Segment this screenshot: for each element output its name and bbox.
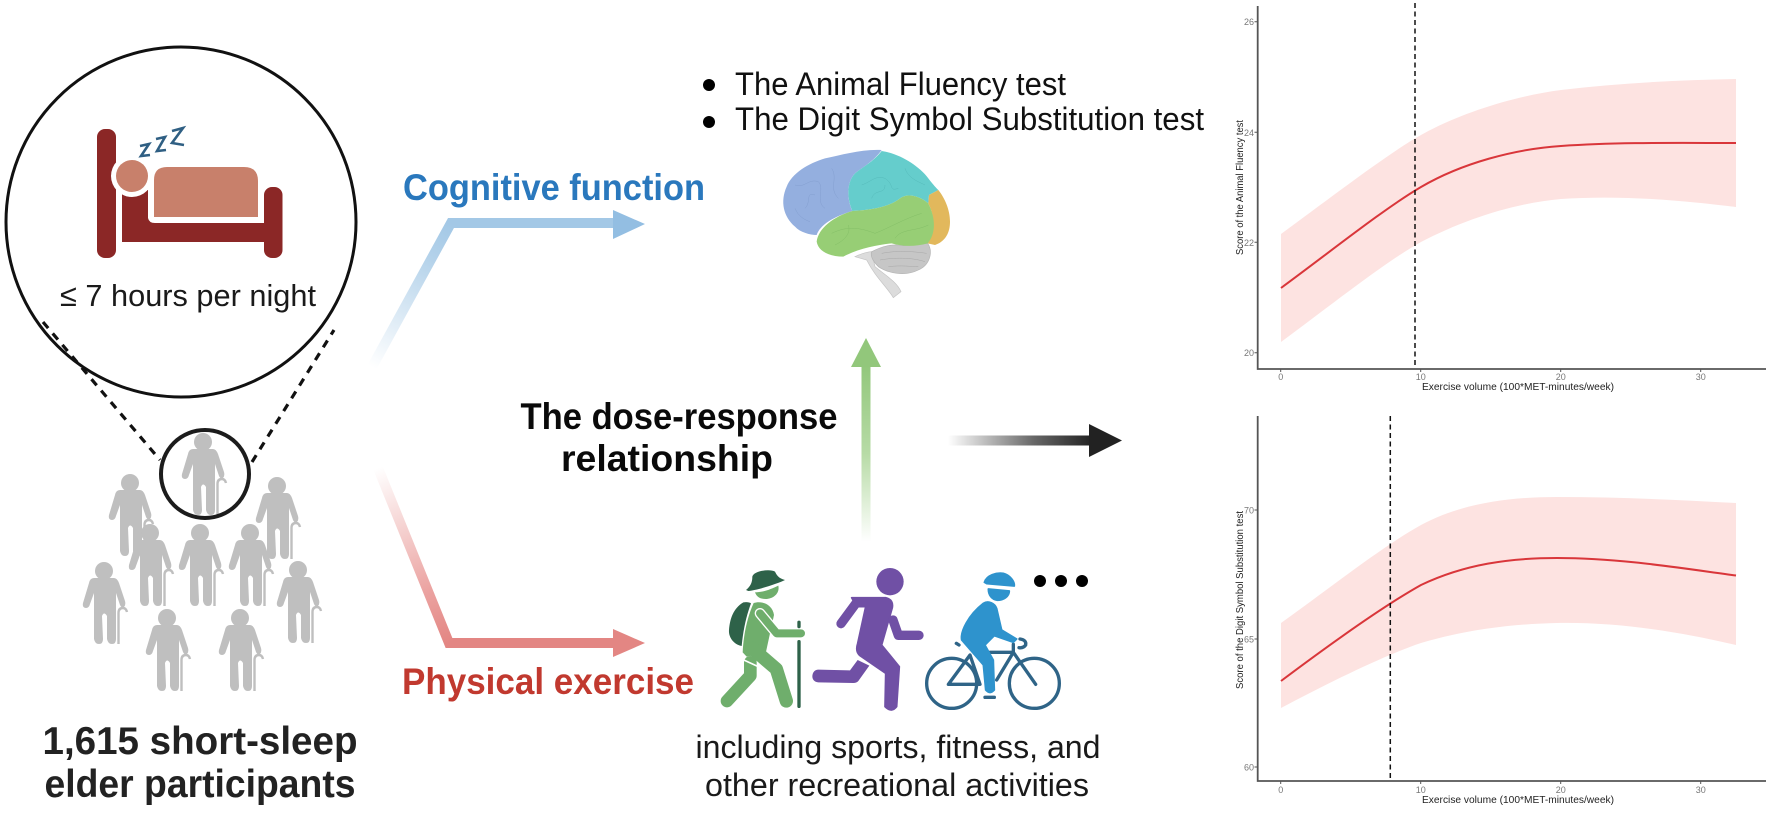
text: cognitive test list [703, 66, 1204, 137]
text: activity description: including sports, fitness, and [696, 729, 1100, 765]
heading: dose-response [520, 396, 838, 479]
icon: cyclist [927, 573, 1059, 708]
axis tick labels [1244, 17, 1706, 382]
text: cognitive test list: The Digit Symbol Substitution test [735, 101, 1204, 137]
arrow: to charts [948, 424, 1122, 457]
axis tick labels: 70 [1244, 506, 1254, 516]
axis tick labels: 60 [1244, 762, 1254, 772]
axis tick labels: 20 [1556, 785, 1566, 795]
text: sleep duration: ≤ 7 hours per night [60, 278, 316, 313]
chart: animal fluency: Score of the Animal Fluency test [1235, 120, 1246, 255]
heading: participants: elder participants [44, 763, 356, 806]
axis tick labels: 20 [1556, 372, 1566, 382]
text: activity description: other recreational activities [705, 767, 1089, 803]
dashed zoom lines [43, 322, 334, 462]
text: cognitive test list: The Animal Fluency test [735, 66, 1066, 102]
chart: digit symbol substitution: Score of the Digit Symbol Substitution test [1235, 511, 1246, 689]
icon: crowd of elders [83, 433, 321, 691]
axis tick labels: 0 [1278, 785, 1283, 795]
chart: digit symbol substitution: Exercise volume (100*MET-minutes/week) [1422, 795, 1614, 806]
axis tick labels: 65 [1244, 634, 1254, 644]
axis tick labels: 30 [1696, 785, 1706, 795]
heading: physical exercise: Physical exercise [402, 661, 694, 702]
axis tick labels: 22 [1244, 238, 1254, 248]
panel: sleep magnifier circle [6, 47, 356, 397]
heading: dose-response: relationship [561, 438, 773, 479]
heading: dose-response: The dose-response [520, 396, 838, 437]
arrow: to cognitive function [372, 210, 645, 367]
icon: runner [812, 568, 919, 710]
icon: hiker [727, 570, 801, 706]
arrow: exercise up to cognition [851, 338, 881, 542]
arrow: to physical exercise [378, 468, 645, 657]
chart: digit symbol substitution [1235, 416, 1766, 806]
axis tick labels: 10 [1416, 372, 1426, 382]
axis tick labels: 30 [1696, 372, 1706, 382]
icon: ellipsis dots [1034, 575, 1088, 587]
chart: animal fluency [1235, 3, 1766, 393]
axis tick labels: 0 [1278, 372, 1283, 382]
axis tick labels [1244, 506, 1706, 795]
icon: small magnifier ring [161, 430, 249, 518]
text: activity description [696, 729, 1100, 803]
heading: participants: 1,615 short-sleep [42, 720, 358, 763]
axis tick labels: 24 [1244, 128, 1254, 138]
icon: bed with sleeper [97, 128, 282, 258]
icon: brain [783, 150, 950, 298]
axis tick labels: 20 [1244, 348, 1254, 358]
axis tick labels: 26 [1244, 17, 1254, 27]
heading: cognitive function: Cognitive function [403, 167, 705, 208]
heading: participants [42, 720, 358, 806]
axis tick labels: 10 [1416, 785, 1426, 795]
chart: animal fluency: Exercise volume (100*MET-minutes/week) [1422, 382, 1614, 393]
